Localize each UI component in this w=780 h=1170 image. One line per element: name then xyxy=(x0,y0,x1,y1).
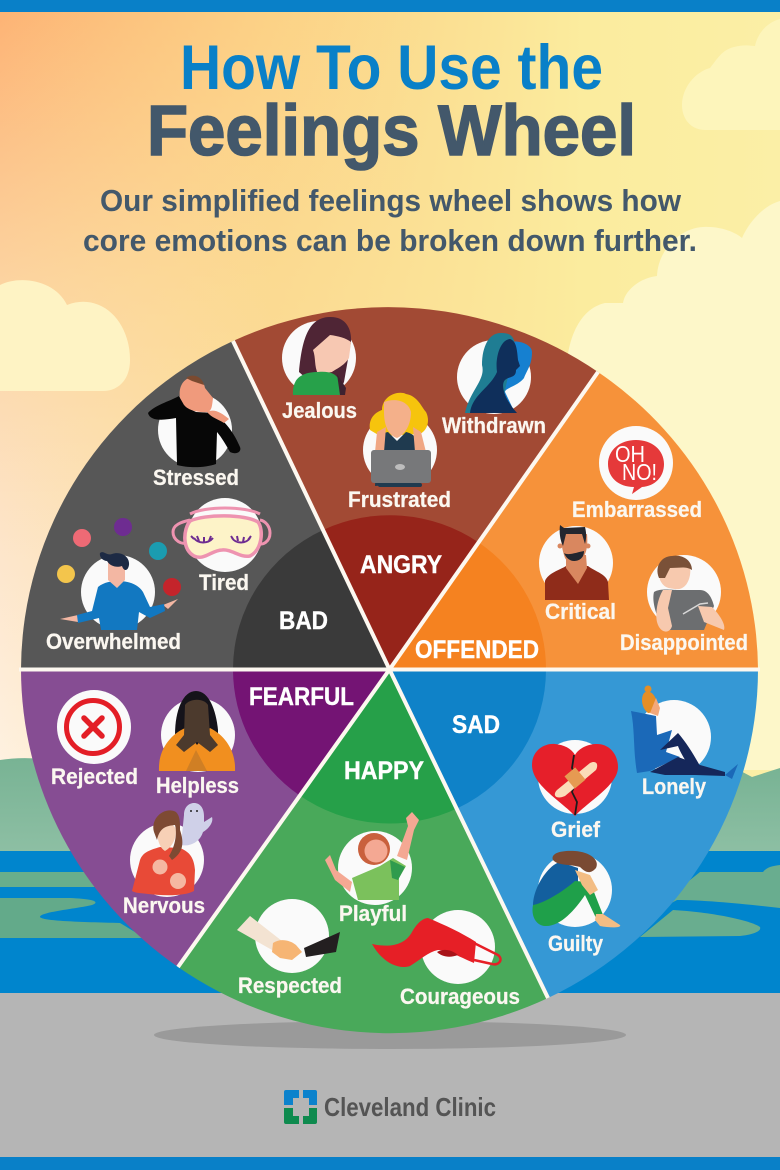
subtitle xyxy=(83,183,697,258)
wheel shadow xyxy=(154,1021,626,1049)
label: grief: Grief xyxy=(551,817,601,842)
label: embarrassed: Embarrassed xyxy=(572,497,702,522)
label: courageous: Courageous xyxy=(400,984,520,1009)
label: fearful: FEARFUL xyxy=(249,683,354,711)
label: lonely: Lonely xyxy=(642,774,707,799)
label: critical: Critical xyxy=(545,599,616,624)
label: stressed: Stressed xyxy=(153,465,239,490)
icon: embarrassed: NO! xyxy=(622,459,657,485)
icon: grief xyxy=(532,740,618,816)
icon: jealous xyxy=(282,317,356,395)
cloud: right behind wheel xyxy=(566,201,780,770)
panel: offended xyxy=(390,372,758,669)
icon: playful xyxy=(325,812,419,905)
label: playful: Playful xyxy=(339,901,407,926)
label: tired: Tired xyxy=(199,570,249,595)
panel: happy xyxy=(178,669,548,1033)
logo: cleveland clinic mark xyxy=(284,1090,317,1124)
label: offended: OFFENDED xyxy=(415,636,539,664)
ground xyxy=(0,993,780,1158)
icon: respected xyxy=(237,899,340,973)
panel: angry xyxy=(233,307,598,669)
right river banks xyxy=(640,865,780,920)
label: respected: Respected xyxy=(238,973,342,998)
subtitle: core emotions can be broken down further. xyxy=(83,223,697,258)
icon: overwhelmed xyxy=(57,518,181,630)
cloud: left xyxy=(0,280,130,391)
icon: disappointed xyxy=(647,555,724,632)
bottom bar xyxy=(0,1157,780,1170)
top bar xyxy=(0,0,780,12)
icon: embarrassed: OH xyxy=(615,441,645,467)
panel: sad xyxy=(390,669,758,998)
panel: bad xyxy=(21,341,390,669)
label: happy: HAPPY xyxy=(344,757,424,785)
icon: embarrassed xyxy=(599,426,673,500)
label: helpless: Helpless xyxy=(156,773,239,798)
label: guilty: Guilty xyxy=(548,931,604,956)
right hill xyxy=(700,768,780,860)
icon: frustrated xyxy=(363,393,437,487)
logo: cleveland clinic wordmark: Cleveland Clinic xyxy=(324,1092,496,1122)
icon: nervous xyxy=(130,803,212,897)
label: jealous: Jealous xyxy=(282,398,357,423)
water xyxy=(0,851,780,994)
icon: critical xyxy=(539,525,613,600)
title: How To Use the xyxy=(180,33,603,103)
label: nervous: Nervous xyxy=(123,893,205,918)
label: angry: ANGRY xyxy=(360,551,442,579)
icon: helpless xyxy=(159,691,235,772)
label: overwhelmed: Overwhelmed xyxy=(46,629,181,654)
label: sad: SAD xyxy=(452,711,500,739)
icon: tired xyxy=(173,498,270,572)
label: withdrawn: Withdrawn xyxy=(442,413,546,438)
feelings wheel xyxy=(19,307,760,1033)
icon: withdrawn xyxy=(457,333,532,414)
label: bad: BAD xyxy=(279,607,328,635)
cloud: upper right xyxy=(682,19,780,130)
icon: stressed xyxy=(148,376,240,467)
icon: lonely xyxy=(631,686,738,779)
subtitle: Our simplified feelings wheel shows how xyxy=(100,183,682,218)
label: frustrated: Frustrated xyxy=(348,487,451,512)
icon: rejected xyxy=(57,690,131,764)
left hill xyxy=(0,758,200,860)
icon: courageous xyxy=(372,910,500,984)
left river banks xyxy=(0,872,105,887)
title xyxy=(147,33,636,171)
icon: guilty xyxy=(532,851,620,927)
label: rejected: Rejected xyxy=(51,764,138,789)
panel: fearful xyxy=(21,669,390,967)
label: disappointed: Disappointed xyxy=(620,630,748,655)
title: Feelings Wheel xyxy=(147,92,636,171)
